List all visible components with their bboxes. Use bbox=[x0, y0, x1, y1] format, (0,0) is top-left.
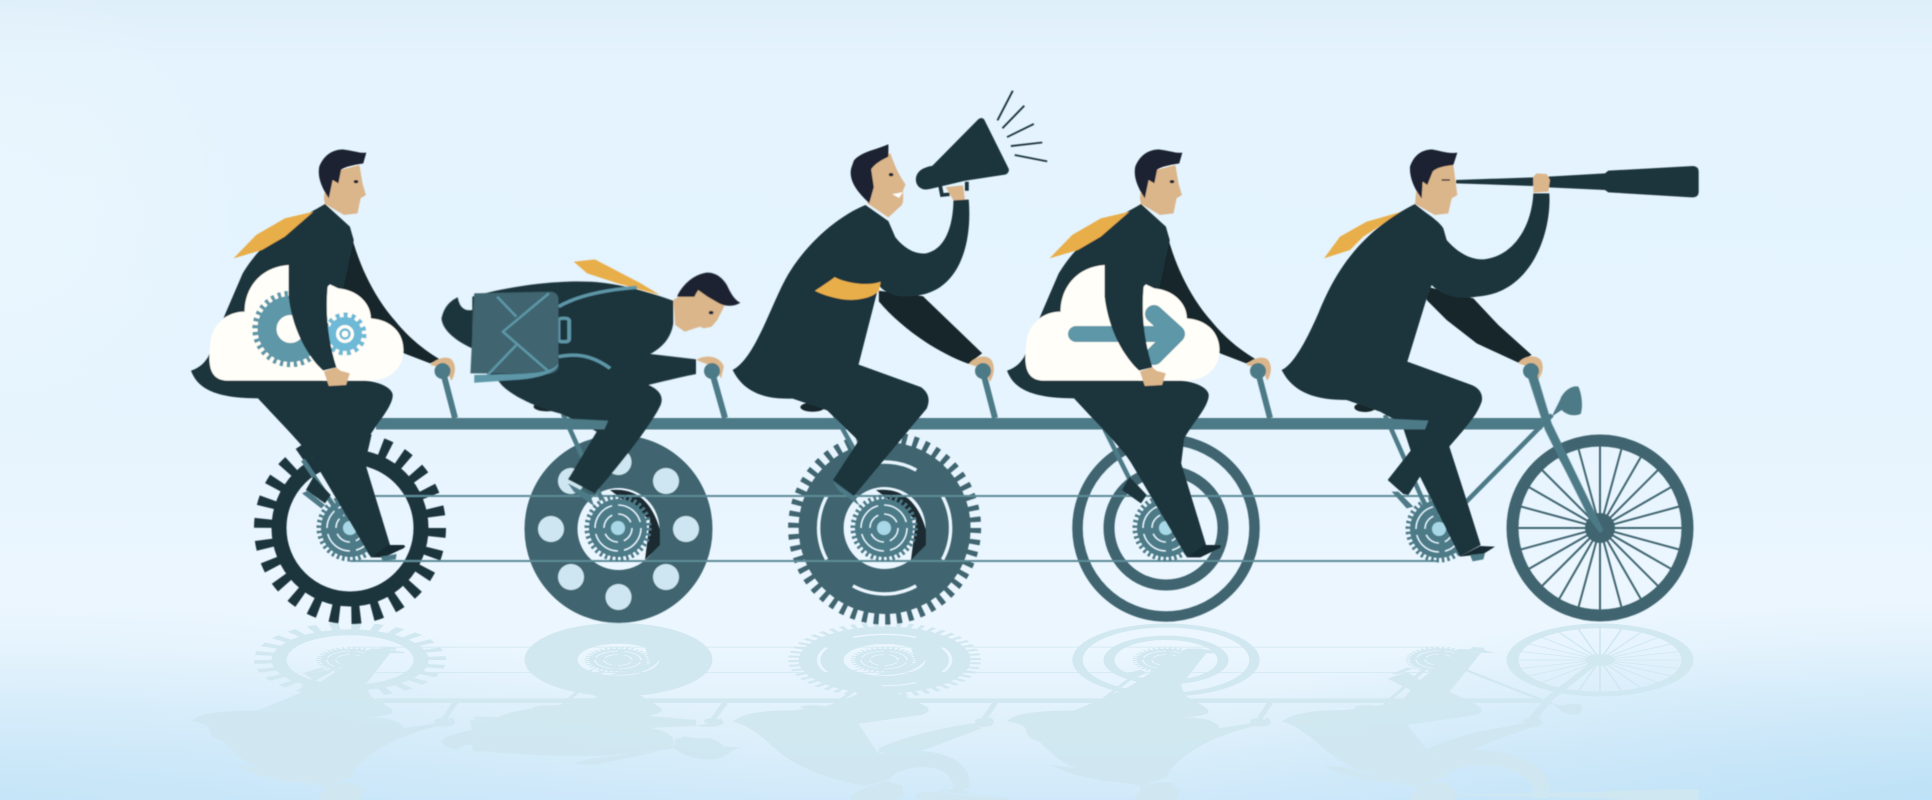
bar over body bbox=[1380, 418, 1428, 429]
eye bbox=[709, 311, 713, 314]
megaphone bbox=[916, 118, 1009, 190]
shoe bbox=[1187, 545, 1221, 557]
water reflection of the whole team bbox=[191, 625, 1699, 800]
body and legs bbox=[472, 281, 696, 493]
near arm bbox=[289, 204, 354, 371]
frame down tube bbox=[1466, 415, 1552, 502]
body, raised arm and leg bbox=[733, 200, 969, 496]
tandem bicycle illustration bbox=[190, 90, 1700, 800]
head lamp bbox=[1552, 386, 1582, 417]
face bbox=[1140, 165, 1182, 215]
hand on megaphone bbox=[946, 185, 965, 200]
megaphone handle bbox=[940, 182, 967, 195]
cloud arrow bbox=[1076, 314, 1176, 356]
grip hand bbox=[430, 358, 455, 381]
hair bbox=[677, 273, 740, 306]
rider 5 with telescope bbox=[1282, 149, 1699, 561]
far arm bbox=[1427, 287, 1532, 363]
rider 4 carrying arrow cloud bbox=[1007, 204, 1256, 557]
disc wheel with holes bbox=[538, 449, 699, 610]
hair bbox=[1135, 149, 1182, 198]
rider 3 with megaphone bbox=[733, 91, 1047, 506]
grip hand bbox=[1518, 356, 1543, 379]
spoked front wheel bbox=[1512, 440, 1688, 616]
smile bbox=[892, 192, 903, 198]
face bbox=[1415, 163, 1457, 215]
handlebar grips bbox=[434, 363, 1539, 379]
tie bbox=[1324, 212, 1402, 258]
shoe bbox=[371, 545, 405, 557]
tie bbox=[574, 259, 660, 295]
eye bbox=[354, 180, 358, 183]
shoe bbox=[568, 483, 594, 506]
cycling team scene bbox=[191, 91, 1699, 619]
bag bottom edge bbox=[474, 363, 558, 383]
grip hand bbox=[969, 356, 994, 382]
hand bbox=[324, 367, 350, 386]
rider 4 upper body bbox=[1105, 149, 1271, 386]
eye bbox=[1170, 180, 1174, 183]
far arm bbox=[1144, 230, 1256, 363]
rider 1 upper body bbox=[289, 149, 455, 386]
grip hand bbox=[1246, 358, 1271, 381]
face bbox=[867, 153, 906, 217]
tie bbox=[234, 212, 314, 258]
bag straps bbox=[558, 287, 637, 368]
face bbox=[324, 165, 366, 215]
face bbox=[673, 285, 725, 332]
seat bbox=[1354, 403, 1376, 412]
cloud gears bbox=[255, 294, 364, 364]
main frame bar bbox=[376, 418, 1542, 430]
hand bbox=[1140, 367, 1166, 386]
shoe bbox=[833, 482, 860, 506]
bag flap bbox=[488, 293, 549, 375]
pedals bbox=[1392, 492, 1485, 561]
bar over body bbox=[560, 418, 608, 429]
seat bbox=[534, 402, 560, 411]
mail bag bbox=[470, 292, 558, 374]
handlebars bbox=[443, 372, 1270, 418]
telescope bbox=[1456, 166, 1699, 197]
drive chain lines bbox=[350, 496, 1439, 561]
hand on telescope bbox=[1533, 173, 1550, 193]
seat tubes bbox=[303, 410, 1425, 530]
far leg bbox=[1122, 477, 1147, 503]
concentric ring wheel bbox=[1078, 440, 1254, 616]
sprockets bbox=[319, 497, 1470, 560]
far arm bbox=[328, 230, 440, 363]
fine-toothed gear wheel bbox=[794, 437, 976, 619]
near arm bbox=[1105, 204, 1170, 371]
eye bbox=[1442, 178, 1450, 182]
coat and legs bbox=[191, 204, 393, 557]
rider 2 crouching with mail bag bbox=[442, 259, 740, 506]
seat bbox=[800, 402, 825, 412]
tie bbox=[815, 277, 881, 300]
grip hand bbox=[696, 357, 724, 378]
hair bbox=[319, 149, 366, 198]
cloud bbox=[209, 265, 403, 381]
tie bbox=[1050, 212, 1130, 258]
cloud bbox=[1025, 265, 1219, 381]
gear wheel bbox=[263, 441, 437, 615]
coat and legs bbox=[1007, 204, 1209, 557]
eye bbox=[889, 173, 893, 176]
pedals bbox=[302, 491, 397, 561]
far leg bbox=[306, 477, 331, 503]
body, arm and legs bbox=[1282, 193, 1550, 557]
coat tail bbox=[442, 297, 472, 348]
sound lines bbox=[997, 91, 1047, 161]
rider 1 carrying gear cloud bbox=[191, 204, 440, 561]
hair bbox=[851, 144, 888, 203]
far arm bbox=[879, 291, 982, 364]
shoe bbox=[1460, 546, 1495, 557]
hair bbox=[1410, 149, 1457, 198]
front fork bbox=[1527, 373, 1603, 533]
